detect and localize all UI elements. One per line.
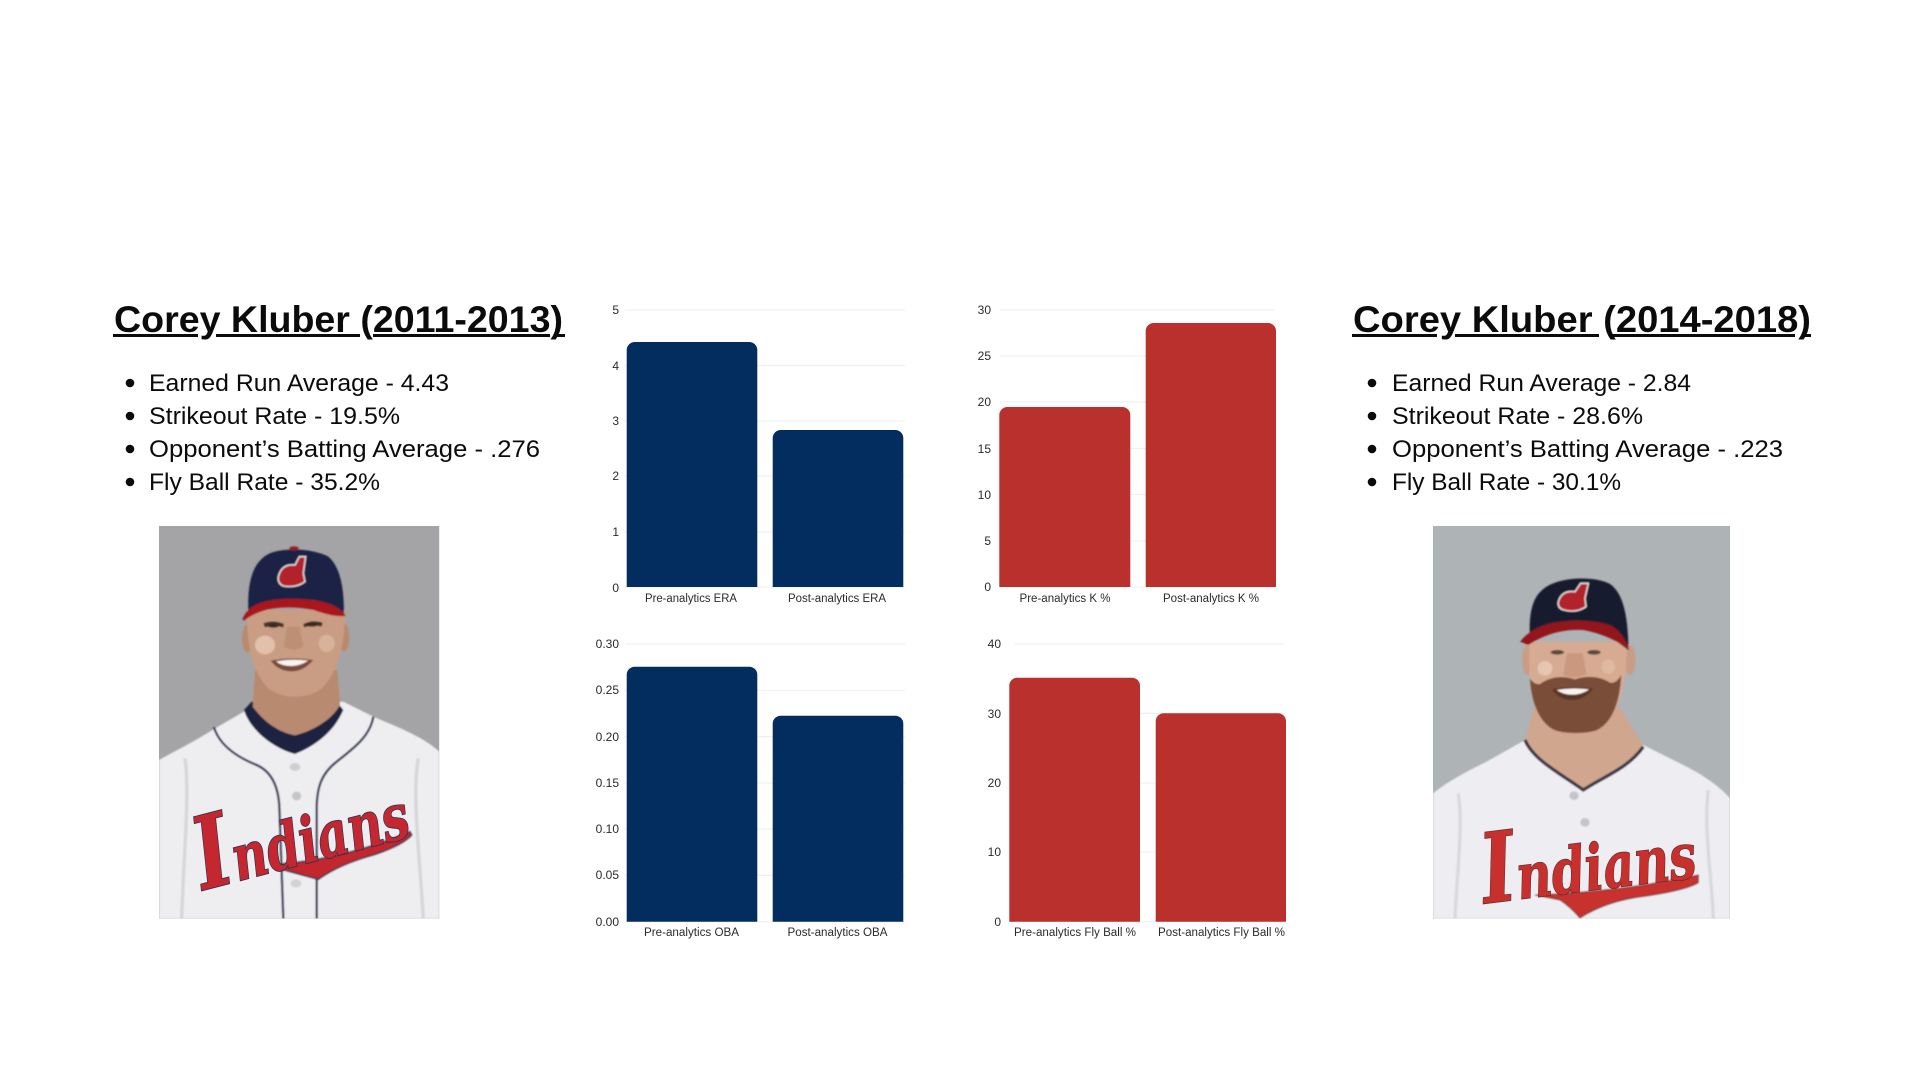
chart: opponent batting average pre vs post analytics: 0.10	[596, 822, 619, 836]
chart: fly ball rate pre vs post analytics	[988, 637, 1286, 939]
stat list: pre-analytics: Strikeout Rate - 19.5%	[149, 403, 400, 430]
chart: fly ball rate pre vs post analytics: 0	[994, 915, 1001, 929]
bar: pre-analytics fly ball 35.2	[1009, 678, 1140, 922]
chart: opponent batting average pre vs post analytics: Post-analytics OBA	[788, 927, 888, 939]
chart: opponent batting average pre vs post analytics: Pre-analytics OBA	[644, 927, 739, 939]
panel: pre-analytics stats	[113, 299, 565, 496]
stat list: pre-analytics	[126, 370, 540, 496]
bar: post-analytics K% 28.6	[1146, 323, 1276, 587]
chart: ERA pre vs post analytics: 2	[612, 469, 619, 483]
heading: Corey Kluber (2014-2018): Corey Kluber (2014-2018)	[1353, 299, 1811, 340]
chart: ERA pre vs post analytics: 0	[612, 581, 619, 595]
chart: fly ball rate pre vs post analytics: 40	[988, 637, 1001, 651]
chart: strikeout rate pre vs post analytics: 10	[978, 488, 991, 502]
bar: post-analytics OBA .223	[773, 716, 903, 922]
bar: pre-analytics OBA .276	[627, 667, 757, 922]
chart: opponent batting average pre vs post analytics: 0.20	[596, 730, 619, 744]
jersey lettering: Indians: Indians	[1472, 787, 1701, 926]
stat list: post-analytics: Opponent’s Batting Average - .223	[1392, 436, 1783, 463]
bar: post-analytics fly ball 30.1	[1156, 713, 1286, 922]
photo: Kluber 2011-2013 portrait	[159, 526, 439, 919]
chart: ERA pre vs post analytics: 5	[612, 303, 619, 317]
chart: strikeout rate pre vs post analytics: Post-analytics K %	[1163, 593, 1259, 605]
chart: ERA pre vs post analytics: Post-analytics ERA	[788, 593, 886, 605]
chart: opponent batting average pre vs post analytics: 0.25	[596, 683, 619, 697]
chart: strikeout rate pre vs post analytics: 20	[978, 395, 991, 409]
stat list: post-analytics	[1368, 370, 1783, 496]
stat list: post-analytics: Fly Ball Rate - 30.1%	[1392, 469, 1621, 496]
bar: pre-analytics K% 19.5	[999, 407, 1130, 587]
chart: ERA pre vs post analytics: Pre-analytics ERA	[645, 593, 737, 605]
photo: Kluber 2014-2018 portrait	[1433, 526, 1730, 926]
stat list: pre-analytics: Earned Run Average - 4.43	[149, 370, 449, 397]
stat list: pre-analytics: Fly Ball Rate - 35.2%	[149, 469, 380, 496]
stat list: post-analytics: Strikeout Rate - 28.6%	[1392, 403, 1643, 430]
chart: opponent batting average pre vs post analytics: 0.30	[596, 637, 619, 651]
stat list: post-analytics: Earned Run Average - 2.84	[1392, 370, 1691, 397]
chart: strikeout rate pre vs post analytics	[978, 303, 1276, 605]
heading: Corey Kluber (2011-2013): Corey Kluber (2011-2013)	[114, 299, 563, 340]
chart: ERA pre vs post analytics: 4	[612, 359, 619, 373]
chart: opponent batting average pre vs post analytics: 0.05	[596, 868, 619, 882]
chart: fly ball rate pre vs post analytics: Pre-analytics Fly Ball %	[1014, 927, 1136, 939]
chart: strikeout rate pre vs post analytics: 5	[984, 534, 991, 548]
chart: strikeout rate pre vs post analytics: 0	[984, 580, 991, 594]
chart: strikeout rate pre vs post analytics: Pre-analytics K %	[1020, 593, 1110, 605]
chart: ERA pre vs post analytics: 1	[612, 525, 619, 539]
chart: ERA pre vs post analytics: 3	[612, 414, 619, 428]
chart: fly ball rate pre vs post analytics: 20	[988, 776, 1001, 790]
bar: post-analytics ERA 2.84	[773, 430, 903, 587]
chart: fly ball rate pre vs post analytics: Post-analytics Fly Ball %	[1158, 927, 1285, 939]
chart: ERA pre vs post analytics	[612, 303, 905, 605]
chart: strikeout rate pre vs post analytics: 30	[978, 303, 991, 317]
chart: fly ball rate pre vs post analytics: 30	[988, 707, 1001, 721]
chart: strikeout rate pre vs post analytics: 25	[978, 349, 991, 363]
chart: opponent batting average pre vs post analytics: 0.15	[596, 776, 619, 790]
chart: opponent batting average pre vs post analytics: 0.00	[596, 915, 619, 929]
bar: pre-analytics ERA 4.43	[627, 342, 757, 587]
chart: opponent batting average pre vs post analytics	[596, 637, 905, 939]
stat list: pre-analytics: Opponent’s Batting Average - .276	[149, 436, 540, 463]
chart: fly ball rate pre vs post analytics: 10	[988, 845, 1001, 859]
jersey lettering: Indians: Indians	[178, 745, 419, 914]
panel: post-analytics stats	[1352, 299, 1811, 496]
chart: strikeout rate pre vs post analytics: 15	[978, 442, 991, 456]
